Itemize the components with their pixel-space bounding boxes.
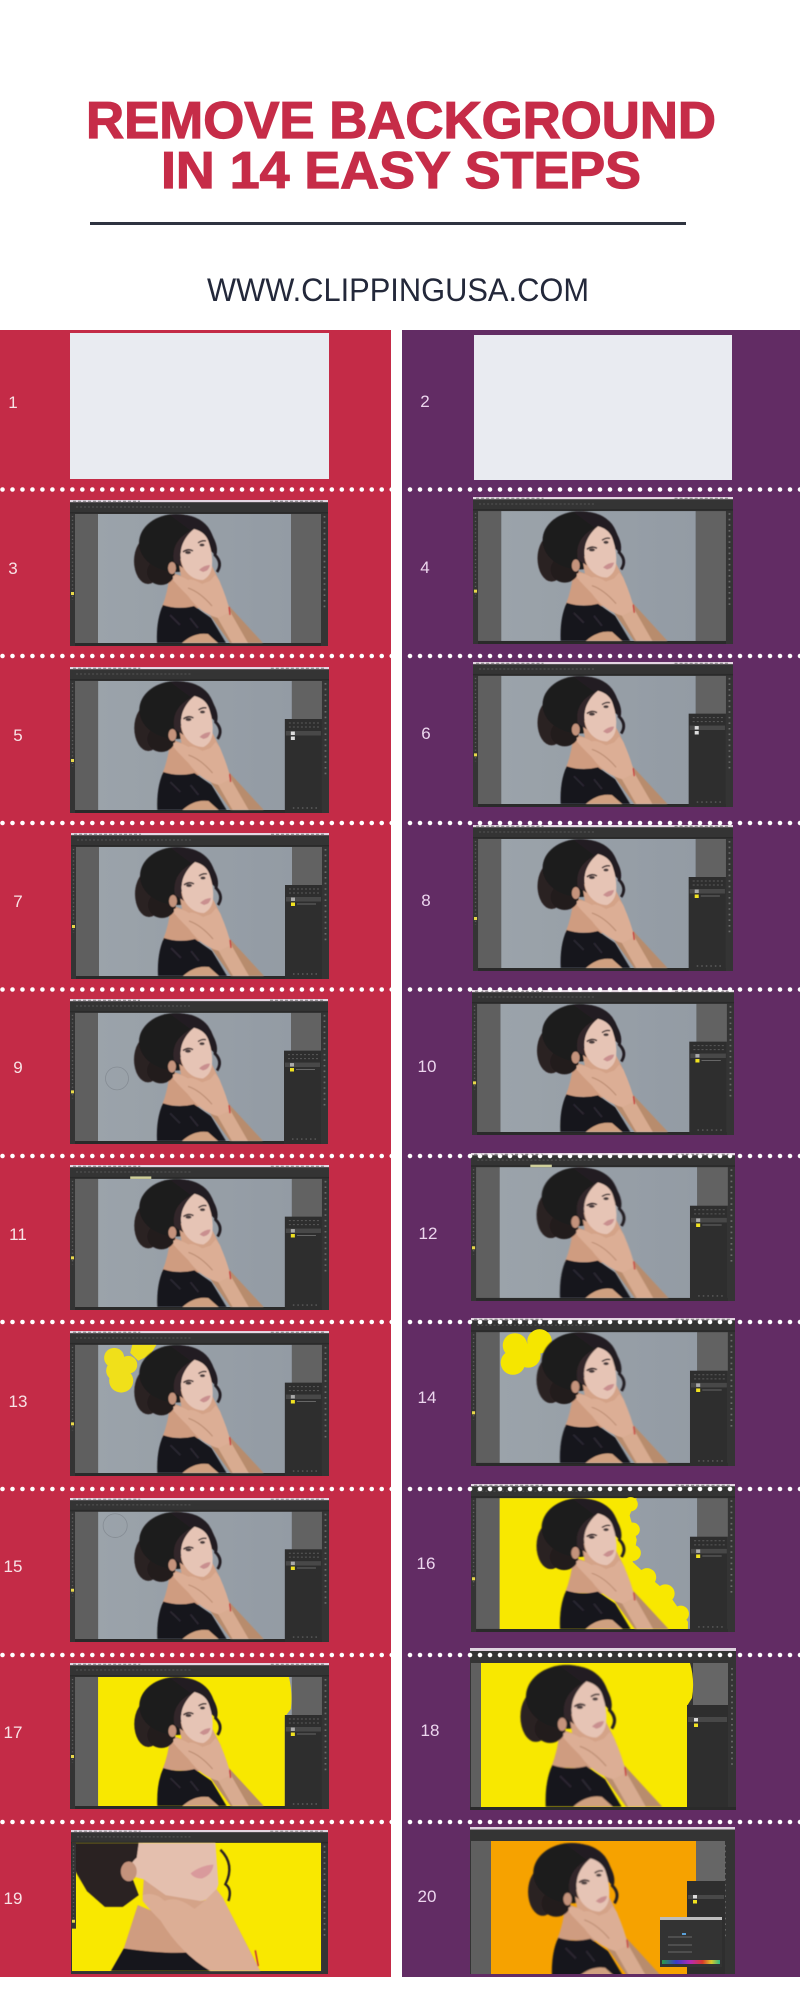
step 17 number: 17	[4, 1723, 22, 1742]
step 15 screenshot with brush circle	[70, 1498, 329, 1642]
step 20 number: 20	[418, 1887, 436, 1906]
step 12 number: 12	[419, 1224, 437, 1243]
panel: right purple column	[402, 330, 800, 1977]
panel: left red column	[0, 330, 391, 1977]
step 11 number: 11	[9, 1225, 27, 1244]
step 10 number: 10	[418, 1057, 436, 1076]
step 3 screenshot	[70, 500, 328, 646]
step 2 number: 2	[420, 392, 430, 411]
step 6 screenshot	[473, 662, 733, 807]
step 20 screenshot orange with hue dialog	[470, 1827, 735, 1974]
step 16 screenshot partly yellow	[471, 1484, 735, 1632]
step 3 number: 3	[8, 559, 18, 578]
step 5 number: 5	[13, 726, 23, 745]
step 7 number: 7	[13, 892, 23, 911]
step 4 number: 4	[420, 558, 430, 577]
step 8 number: 8	[421, 891, 431, 910]
website url: WWW.CLIPPINGUSA.COM	[207, 272, 589, 308]
hue saturation dialog	[660, 1917, 722, 1967]
step 18 screenshot yellow enlarged	[470, 1648, 736, 1810]
step 14 number: 14	[418, 1388, 436, 1407]
step 1 number: 1	[8, 393, 18, 412]
step 12 screenshot	[471, 1153, 735, 1301]
step 16 number: 16	[417, 1554, 435, 1573]
step 13 screenshot with first yellow strokes	[70, 1331, 329, 1476]
step 13 number: 13	[9, 1392, 27, 1411]
step 9 number: 9	[13, 1058, 23, 1077]
step 1 blank placeholder	[70, 333, 329, 479]
step 7 screenshot	[71, 833, 329, 979]
step 17 screenshot yellow background	[70, 1663, 329, 1809]
step 14 screenshot with yellow strokes	[471, 1318, 735, 1466]
step 5 screenshot	[70, 667, 329, 813]
step 15 number: 15	[4, 1557, 22, 1576]
step 19 number: 19	[4, 1889, 22, 1908]
step 19 screenshot zoomed in	[71, 1830, 328, 1974]
step 9 screenshot with brush circle	[70, 999, 328, 1144]
step 4 screenshot	[473, 497, 733, 644]
title	[86, 95, 716, 195]
step 11 screenshot	[70, 1165, 329, 1310]
step 2 blank placeholder	[474, 335, 732, 480]
step 8 screenshot	[473, 825, 733, 971]
step 10 screenshot	[472, 990, 734, 1135]
step 18 number: 18	[421, 1721, 439, 1740]
step 6 number: 6	[421, 724, 431, 743]
